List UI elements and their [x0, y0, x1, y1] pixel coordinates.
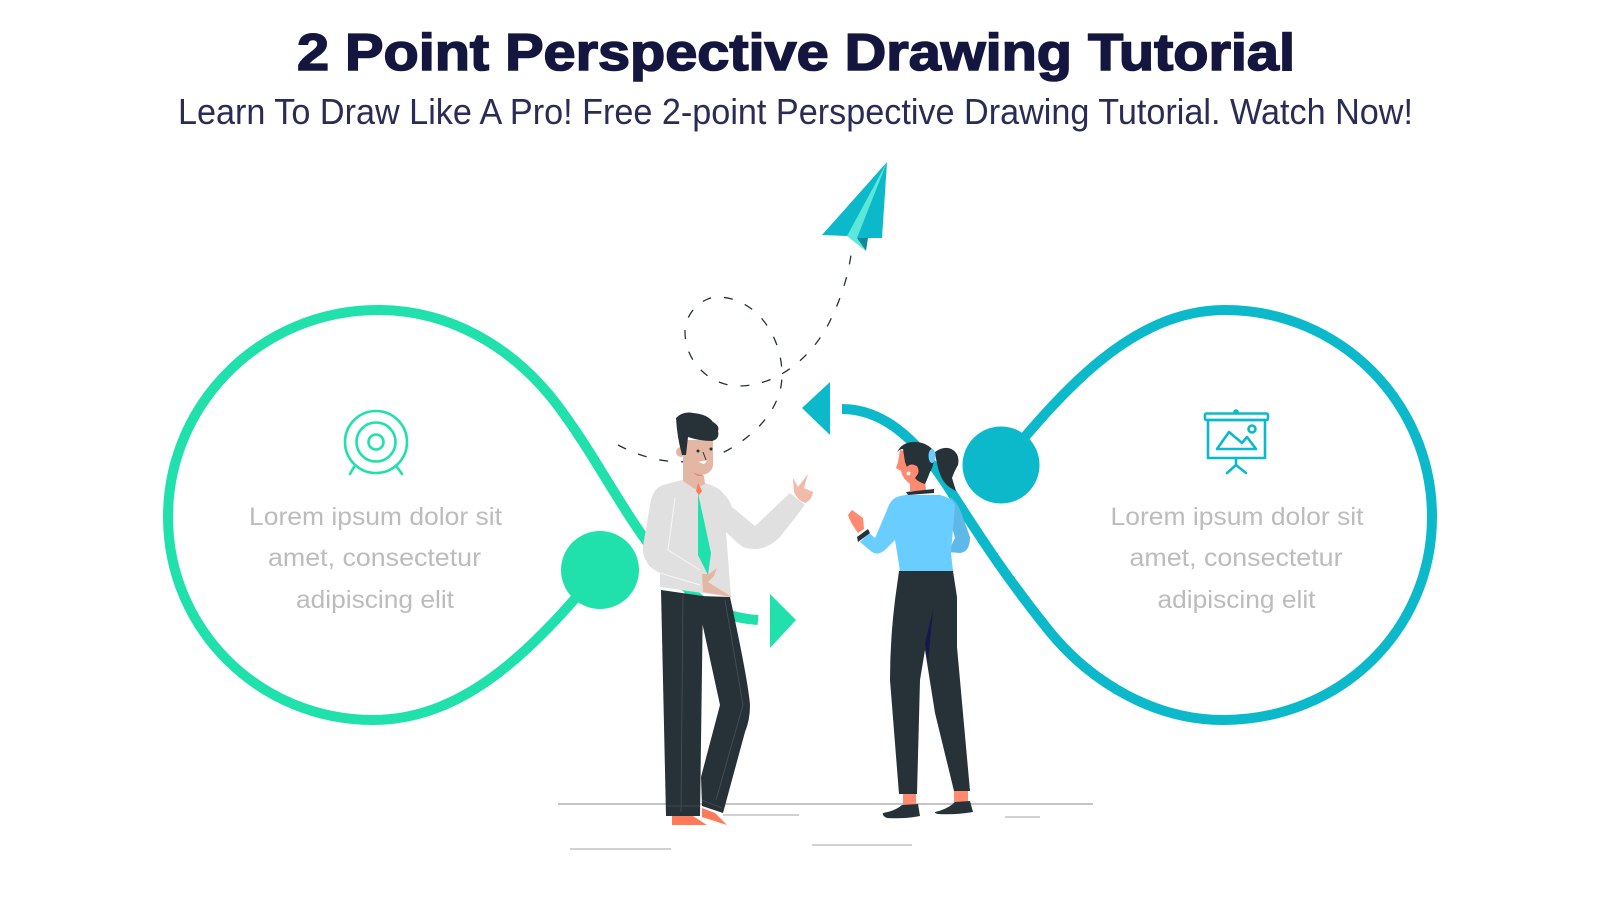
panel: right cyan loop [802, 310, 1432, 720]
right text block: amet, consectetur [1130, 544, 1342, 572]
man facial features [693, 448, 712, 476]
woman illustration [848, 442, 973, 818]
man shoes [672, 808, 727, 825]
cyan loop line [842, 310, 1432, 720]
left text block: adipiscing elit [296, 586, 454, 614]
cyan arrowhead [802, 382, 830, 435]
left text block [249, 503, 502, 614]
icon: paper plane [822, 162, 887, 251]
subtitle: Learn To Draw Like A Pro! Free 2-point Perspective Drawing Tutorial. Watch Now! [178, 91, 1413, 132]
woman hand [848, 510, 864, 533]
right text block: adipiscing elit [1158, 586, 1316, 614]
woman back arm [948, 497, 970, 553]
icon: target [345, 411, 407, 474]
man ear [676, 447, 686, 457]
ponytail [935, 448, 958, 491]
man neck and face [683, 440, 713, 489]
left text block: Lorem ipsum dolor sit [249, 503, 502, 531]
green dot [561, 531, 639, 609]
dashed flight path [618, 255, 851, 462]
woman cuff [857, 529, 870, 542]
woman ear [906, 464, 918, 478]
earring [906, 472, 910, 476]
right text block [1110, 503, 1364, 614]
tie [698, 493, 711, 575]
right text block: Lorem ipsum dolor sit [1110, 503, 1364, 531]
man pointing hand [793, 474, 813, 503]
man illustration [643, 413, 813, 825]
green arrowhead [770, 594, 796, 648]
man shirt [643, 480, 805, 597]
man trousers [661, 590, 750, 816]
trousers shadow [925, 610, 933, 663]
woman hair [897, 442, 934, 484]
icon: presentation board [1205, 410, 1268, 473]
panel: left green loop [168, 310, 796, 720]
ground lines [558, 804, 1093, 849]
woman socks [903, 790, 968, 806]
cyan dot [962, 426, 1040, 504]
man hair [676, 413, 718, 455]
green loop line [168, 310, 758, 720]
trouser creases [667, 595, 743, 812]
man lower hand [702, 568, 732, 597]
woman shoes [883, 801, 973, 818]
title: 2 Point Perspective Drawing Tutorial [297, 24, 1295, 82]
woman trousers [890, 571, 970, 794]
hair tie [928, 449, 936, 463]
woman sweater [860, 495, 955, 571]
shirt folds [660, 498, 700, 585]
left text block: amet, consectetur [268, 544, 481, 572]
tie knot [696, 483, 702, 495]
woman face and neck [896, 450, 928, 491]
woman collar [906, 489, 934, 495]
